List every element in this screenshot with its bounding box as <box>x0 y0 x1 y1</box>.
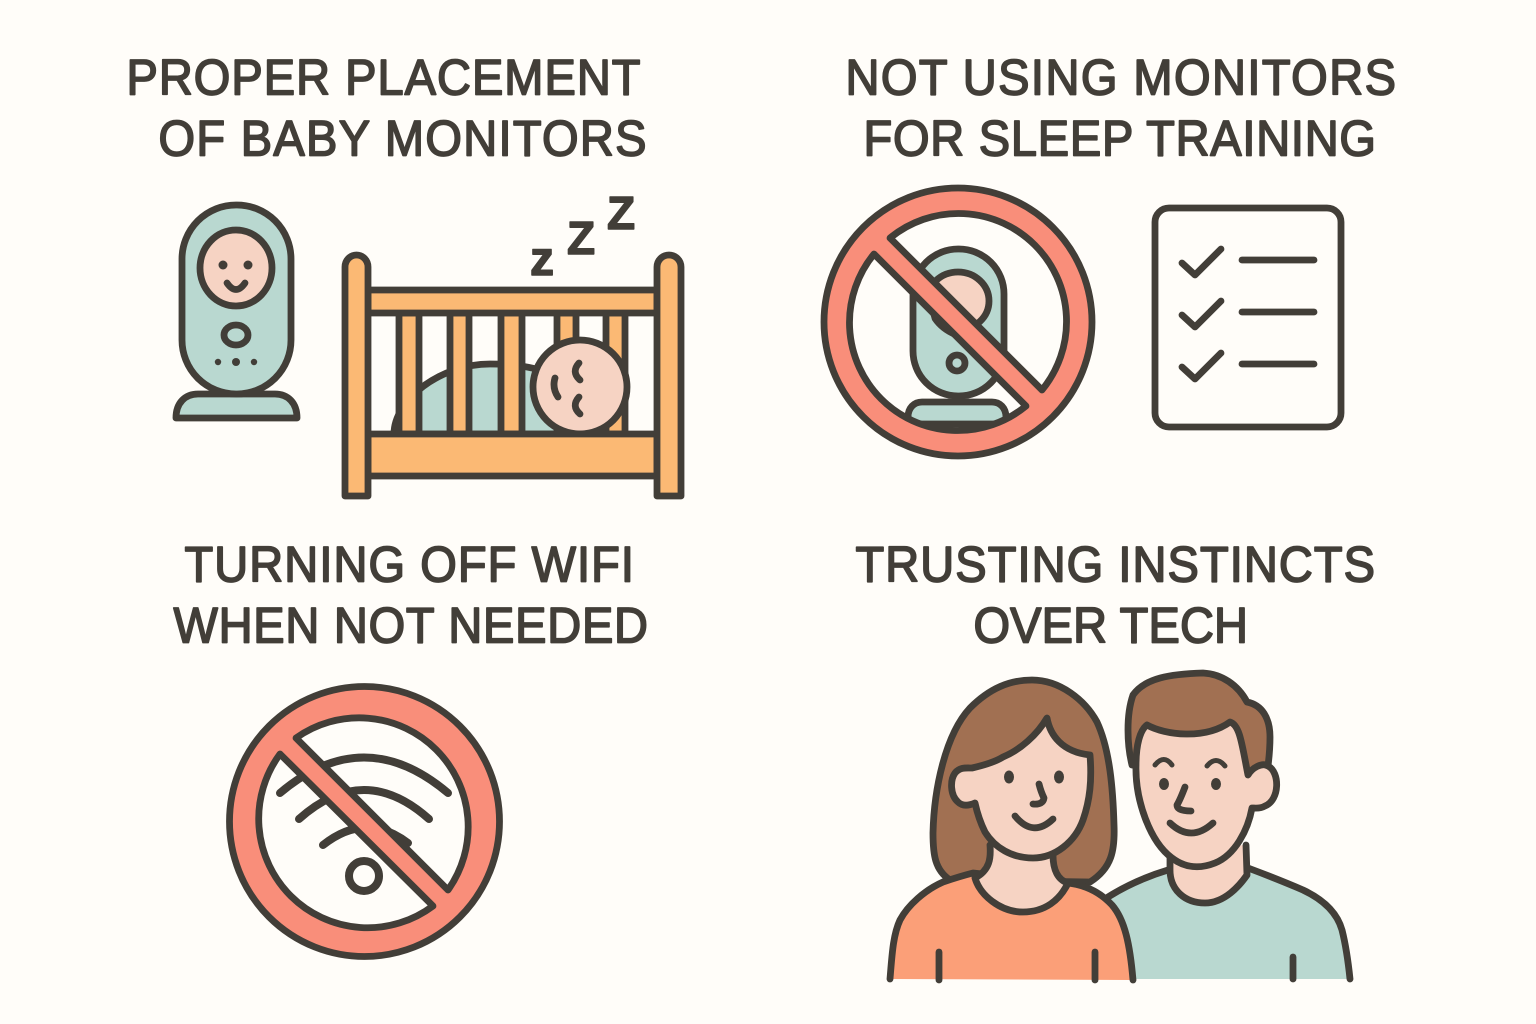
icon: mother <box>890 680 1133 980</box>
heading: proper placement: PROPER PLACEMENT <box>126 50 640 106</box>
crib slats <box>399 313 625 434</box>
infographic canvas <box>130 58 1395 984</box>
heading: turning off wifi: TURNING OFF WIFI <box>184 537 634 593</box>
icon: sleeping z letters: z <box>530 233 554 286</box>
panel: not using monitors for sleep training <box>824 50 1396 456</box>
icon: baby monitor <box>176 205 297 418</box>
heading: not using monitors: NOT USING MONITORS <box>846 50 1396 106</box>
heading: trusting instincts: OVER TECH <box>974 598 1248 654</box>
baby head <box>533 340 627 434</box>
panel: turning off wifi when not needed <box>174 537 648 956</box>
icon: sleeping z letters <box>530 187 635 286</box>
icon: prohibited monitor <box>824 188 1092 456</box>
icon: checklist <box>1155 208 1341 427</box>
wifi symbol <box>280 758 448 891</box>
panel: trusting instincts over tech <box>856 537 1375 980</box>
heading: proper placement <box>126 50 646 167</box>
heading: trusting instincts <box>856 537 1375 654</box>
heading: proper placement: OF BABY MONITORS <box>158 111 646 167</box>
heading: trusting instincts: TRUSTING INSTINCTS <box>856 537 1375 593</box>
icon: prohibited wifi <box>230 686 500 956</box>
heading: not using monitors <box>846 50 1396 167</box>
blanket <box>394 364 560 434</box>
crossed monitor <box>908 249 1006 424</box>
crib rails <box>368 290 657 476</box>
icon: sleeping z letters: Z <box>607 187 635 239</box>
icon: crib with sleeping baby <box>345 255 681 496</box>
panel: proper placement of baby monitors <box>126 50 681 496</box>
heading: turning off wifi: WHEN NOT NEEDED <box>174 598 648 654</box>
heading: turning off wifi <box>174 537 648 654</box>
icon: father <box>1100 673 1350 979</box>
heading: not using monitors: FOR SLEEP TRAINING <box>864 111 1376 167</box>
crib posts <box>345 255 681 496</box>
icon: sleeping z letters: Z <box>567 212 595 264</box>
